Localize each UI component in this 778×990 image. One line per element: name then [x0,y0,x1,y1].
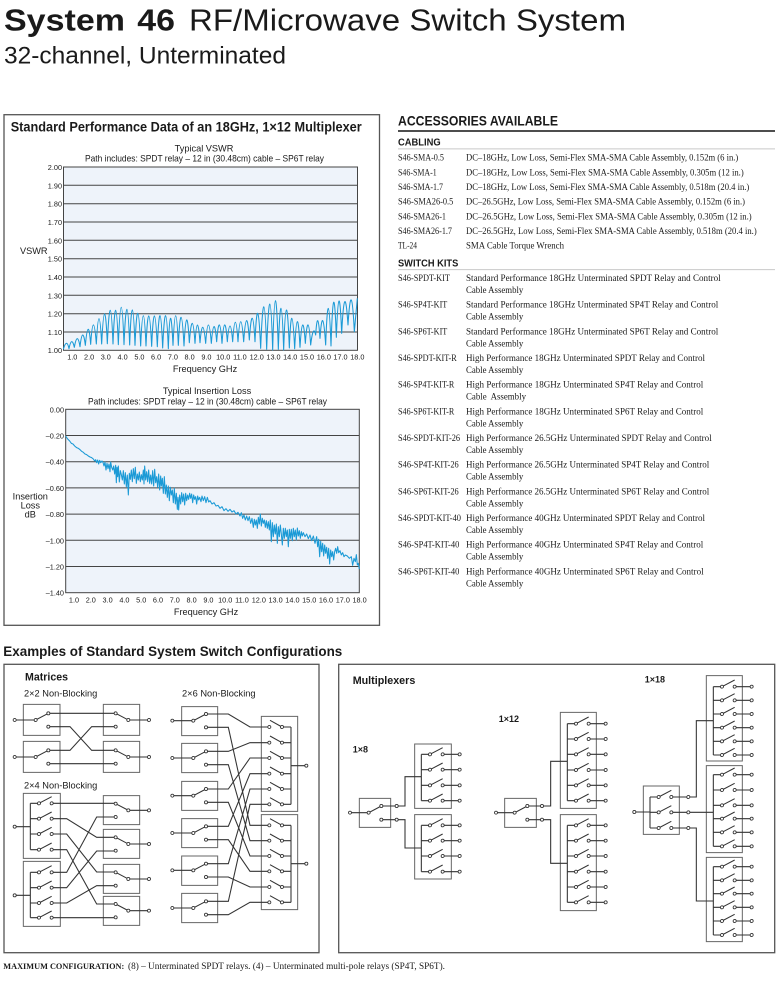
VSWR axis titles: Frequency GHz [173,364,238,374]
accessories: switch kits: High Performance 40GHz Unterminated SPDT Relay and Control [466,513,705,524]
diagram: 2x6 non-blocking [171,707,308,923]
VSWR axis titles: VSWR [20,246,48,256]
accessories: switch kits: Cable Assembly [466,392,526,403]
VSWR y axis labels: 2.00 [48,163,62,172]
VSWR x axis labels [67,352,364,361]
insertion loss x axis labels: 14.0 [285,595,300,604]
insertion loss y axis labels: –0.80 [46,510,64,519]
VSWR y axis labels: 1.20 [48,310,62,319]
accessories: cabling: DC–18GHz, Low Loss, Semi-Flex SMA-SMA Cable Assembly, 0.152m (6 in.) [466,153,738,164]
multiplexers heading: Multiplexers [353,675,415,687]
section heading: switch configurations: Examples of Standard System Switch Configurations [3,644,342,659]
footnote: maximum configuration: MAXIMUM CONFIGURATION: [3,961,124,971]
VSWR x axis labels: 16.0 [317,352,331,361]
accessories: cabling: CABLING [398,138,441,148]
accessories: switch kits: Standard Performance 18GHz Unterminated SPDT Relay and Control [466,273,721,284]
accessories: switch kits: SWITCH KITS [398,259,458,270]
accessories: switch kits: S46-SPDT-KIT-26 [398,433,460,444]
accessories: cabling: S46-SMA-1.7 [398,182,443,193]
diagram: 2x2 non-blocking [13,704,151,772]
matrices heading: Matrices [25,672,68,684]
chart: typical VSWR: Path includes: SPDT relay – 12 in (30.48cm) cable – SP6T relay [85,154,324,164]
diagram: 1x8 multiplexer [348,744,461,879]
accessories: cabling: S46-SMA26-1.7 [398,226,452,237]
accessories: switch kits: Cable Assembly [466,498,523,509]
accessories: switch kits: Cable Assembly [466,472,523,483]
diagram: 1x18 multiplexer [633,676,753,942]
accessories: switch kits: S46-SP6T-KIT [398,326,447,337]
insertion loss x axis labels: 13.0 [268,595,283,604]
accessories: switch kits: Cable Assembly [466,285,523,296]
insertion loss x axis labels: 2.0 [86,595,96,604]
insertion loss x axis labels: 15.0 [302,595,316,604]
insertion loss y axis labels: –1.20 [46,562,64,572]
accessories: switch kits [398,259,775,589]
accessories: switch kits: Cable Assembly [466,552,523,563]
VSWR x axis labels: 10.0 [216,352,230,361]
VSWR y axis labels: 1.00 [48,346,62,355]
VSWR axis titles [20,246,238,374]
VSWR x axis labels: 7.0 [168,352,178,361]
accessories: switch kits: Cable Assembly [466,445,523,456]
insertion loss x axis labels: 1.0 [69,595,79,604]
accessories: cabling: S46-SMA26-1 [398,211,446,222]
VSWR y axis labels: 1.70 [48,218,62,227]
insertion loss axis titles [13,491,239,617]
chart: typical insertion loss: Path includes: SPDT relay – 12 in (30.48cm) cable – SP6T relay [88,396,327,406]
insertion loss x axis labels: 18.0 [352,595,367,604]
accessories: switch kits: S46-SP6T-KIT-40 [398,566,459,577]
accessories: switch kits: S46-SPDT-KIT [398,273,450,284]
insertion loss x axis labels [69,595,367,604]
insertion loss x axis labels: 3.0 [103,595,113,604]
chart: typical VSWR [20,143,364,374]
VSWR x axis labels: 12.0 [250,352,264,361]
VSWR x axis labels: 2.0 [84,352,94,361]
insertion loss x axis labels: 16.0 [319,595,333,604]
insertion loss curve [66,436,359,569]
chart: typical VSWR: Typical VSWR [175,143,234,153]
insertion loss x axis labels: 4.0 [119,595,129,604]
accessories: switch kits: Cable Assembly [466,338,523,349]
VSWR x axis labels: 13.0 [266,352,281,361]
accessories: switch kits: Cable Assembly [466,312,523,323]
footnote: maximum configuration [3,961,445,972]
diagram: 2x4 non-blocking [13,793,151,926]
VSWR x axis labels: 14.0 [283,352,297,361]
label: 1x12: 1×12 [499,714,519,724]
accessories: switch kits: Cable Assembly [466,365,523,376]
insertion loss y axis labels: –0.20 [46,432,64,440]
title [4,3,626,38]
VSWR x axis labels: 18.0 [350,352,364,361]
VSWR y axis labels: 1.80 [48,200,62,209]
VSWR x axis labels: 4.0 [118,352,128,361]
accessories: cabling: DC–18GHz, Low Loss, Semi-Flex SMA-SMA Cable Assembly, 0.518m (20.4 in.) [466,182,749,193]
insertion loss x axis labels: 10.0 [218,595,232,604]
accessories: cabling: DC–26.5GHz, Low Loss, Semi-Flex SMA-SMA Cable Assembly, 0.305m (12 in.) [466,211,752,222]
accessories: cabling: S46-SMA-0.5 [398,153,444,164]
label: 2x6: 2×6 Non-Blocking [182,689,256,699]
diagram: 1x12 multiplexer [494,712,607,911]
panel heading: Standard Performance Data of an 18GHz, 1×12 Multiplexer [11,120,362,135]
insertion loss y axis labels: –1.40 [46,588,64,598]
subtitle: 32-channel, Unterminated [4,42,286,69]
accessories: switch kits: High Performance 40GHz Unterminated SP4T Relay and Control [466,540,704,551]
accessories: cabling: S46-SMA-1 [398,167,437,178]
accessories: switch kits: S46-SPDT-KIT-R [398,353,457,364]
accessories: switch kits: S46-SP4T-KIT-26 [398,460,459,471]
accessories: switch kits: Standard Performance 18GHz Unterminated SP4T Relay and Control [466,300,719,311]
chart: typical insertion loss [13,386,367,617]
insertion loss x axis labels: 7.0 [170,595,180,604]
accessories: switch kits: High Performance 26.5GHz Unterminated SPDT Relay and Control [466,433,712,444]
VSWR x axis labels: 3.0 [101,352,111,361]
insertion loss x axis labels: 5.0 [136,595,146,604]
accessories: switch kits: High Performance 26.5GHz Unterminated SP6T Relay and Control [466,486,710,497]
VSWR y axis labels: 1.30 [48,291,62,300]
accessories: switch kits: Cable Assembly [466,578,523,589]
VSWR y axis labels: 1.10 [48,328,62,337]
label: 2x2: 2×2 Non-Blocking [24,689,97,699]
accessories: switch kits: S46-SP6T-KIT-26 [398,486,459,497]
accessories: switch kits: High Performance 18GHz Unterminated SP6T Relay and Control [466,406,704,417]
VSWR y axis labels: 1.90 [48,181,62,190]
VSWR y axis labels: 1.50 [48,255,62,264]
accessories: switch kits: S46-SP4T-KIT [398,300,447,311]
panel: matrices [4,664,319,953]
insertion loss x axis labels: 12.0 [252,595,266,604]
accessories: switch kits: S46-SPDT-KIT-40 [398,513,461,524]
label: 1x18: 1×18 [645,675,665,685]
panel: multiplexers [339,664,775,953]
insertion loss y axis labels [46,405,64,598]
VSWR y axis labels [48,163,62,355]
insertion loss y axis labels: –0.40 [46,458,64,467]
accessories: switch kits: High Performance 18GHz Unterminated SP4T Relay and Control [466,380,704,391]
accessories: cabling: DC–18GHz, Low Loss, Semi-Flex SMA-SMA Cable Assembly, 0.305m (12 in.) [466,167,744,178]
insertion loss x axis labels: 11.0 [235,595,249,604]
insertion loss axis titles: Loss [21,500,40,510]
label: 2x4: 2×4 Non-Blocking [24,780,97,790]
insertion loss x axis labels: 8.0 [187,595,197,604]
VSWR x axis labels: 1.0 [67,352,77,361]
accessories heading: ACCESSORIES AVAILABLE [398,114,558,129]
accessories: cabling: DC–26.5GHz, Low Loss, Semi-Flex SMA-SMA Cable Assembly, 0.152m (6 in.) [466,197,745,208]
VSWR x axis labels: 9.0 [201,352,211,361]
chart: typical insertion loss: Typical Insertion Loss [163,386,252,396]
insertion loss y axis labels: 0.00 [50,405,64,414]
insertion loss axis titles: Insertion [13,491,48,501]
accessories: switch kits: High Performance 26.5GHz Unterminated SP4T Relay and Control [466,460,710,471]
insertion loss y axis labels: –0.60 [46,484,64,493]
accessories: switch kits: S46-SP4T-KIT-40 [398,540,459,551]
insertion loss x axis labels: 6.0 [153,595,163,604]
VSWR x axis labels: 8.0 [185,352,195,361]
accessories: switch kits: S46-SP6T-KIT-R [398,406,455,417]
footnote: maximum configuration: (8) – Unterminated SPDT relays. (4) – Unterminated multi-pole relays (SP4T, SP6T). [128,961,445,972]
accessories: switch kits: S46-SP4T-KIT-R [398,380,455,391]
VSWR y axis labels: 1.60 [48,236,62,245]
accessories: switch kits: Cable Assembly [466,525,523,536]
VSWR x axis labels: 15.0 [300,352,314,361]
insertion loss x axis labels: 17.0 [336,595,350,604]
title: 46 [137,3,175,38]
accessories: switch kits: Standard Performance 18GHz Unterminated SP6T Relay and Control [466,326,719,337]
VSWR y axis labels: 1.40 [48,273,62,282]
accessories: switch kits: High Performance 18GHz Unterminated SPDT Relay and Control [466,353,705,364]
title: System [4,3,125,38]
panel: standard performance data [4,115,380,625]
insertion loss axis titles: Frequency GHz [174,607,239,617]
insertion loss x axis labels: 9.0 [203,595,213,604]
accessories: cabling: TL-24 [398,241,417,252]
VSWR x axis labels: 6.0 [151,352,161,361]
accessories: switch kits: Cable Assembly [466,418,523,429]
VSWR x axis labels: 11.0 [233,352,247,361]
label: 1x8: 1×8 [353,745,368,755]
insertion loss y axis labels: –1.00 [46,536,64,545]
insertion loss axis titles: dB [25,509,36,519]
accessories: cabling: S46-SMA26-0.5 [398,197,453,208]
VSWR x axis labels: 17.0 [333,352,348,361]
VSWR x axis labels: 5.0 [134,352,144,361]
accessories: cabling [398,138,775,252]
title: RF/Microwave Switch System [189,3,626,38]
VSWR curve [63,298,357,350]
accessories: cabling: SMA Cable Torque Wrench [466,241,564,252]
accessories: switch kits: High Performance 40GHz Unterminated SP6T Relay and Control [466,566,704,577]
